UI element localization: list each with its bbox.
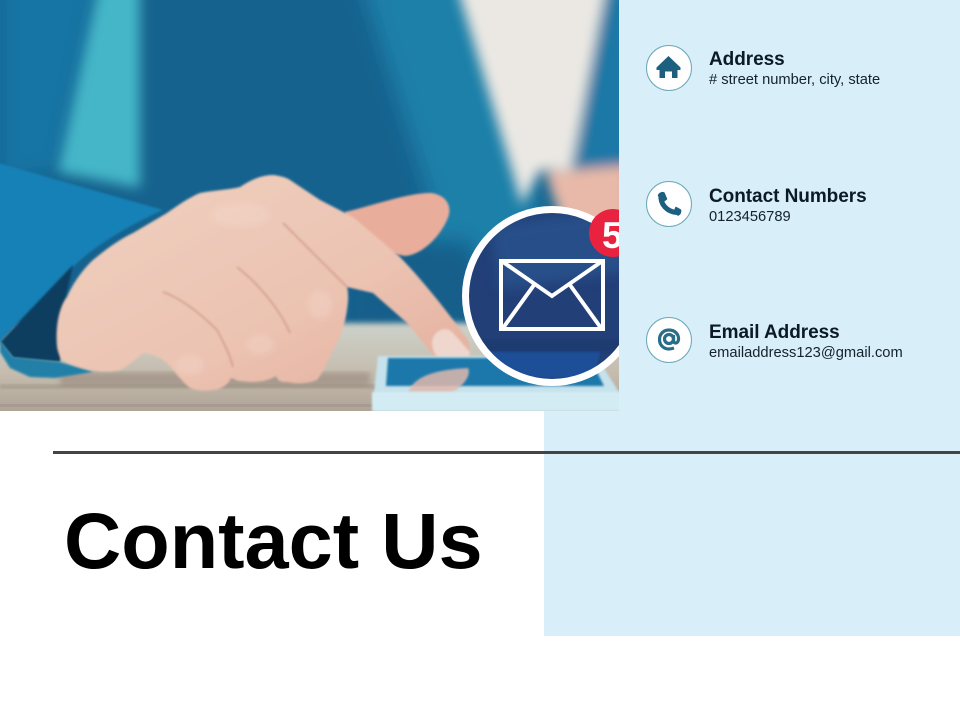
photo: hand touching tablet with email icon	[0, 0, 619, 411]
icon: home	[646, 45, 692, 91]
sleeve	[0, 162, 163, 342]
contact item: address	[646, 45, 880, 91]
text: address detail: # street number, city, state	[709, 72, 880, 88]
heading: contact numbers: Contact Numbers	[709, 186, 867, 207]
title: Contact Us	[64, 496, 483, 585]
nail	[431, 328, 470, 357]
icon: phone	[646, 181, 692, 227]
icon: at sign	[646, 317, 692, 363]
heading: address: Address	[709, 49, 785, 70]
badge: 5 notifications	[589, 209, 619, 257]
contact item: email	[646, 317, 903, 363]
contact item: numbers	[646, 181, 867, 227]
hand	[57, 175, 470, 391]
text: email: emailaddress123@gmail.com	[709, 345, 903, 361]
text: phone number: 0123456789	[709, 209, 791, 225]
icon: envelope	[501, 261, 603, 329]
rear finger	[345, 193, 449, 256]
icon: email notification circle	[465, 205, 640, 382]
table	[0, 323, 630, 423]
heading: email address: Email Address	[709, 322, 840, 343]
divider line	[53, 451, 960, 454]
tablet	[374, 356, 619, 411]
